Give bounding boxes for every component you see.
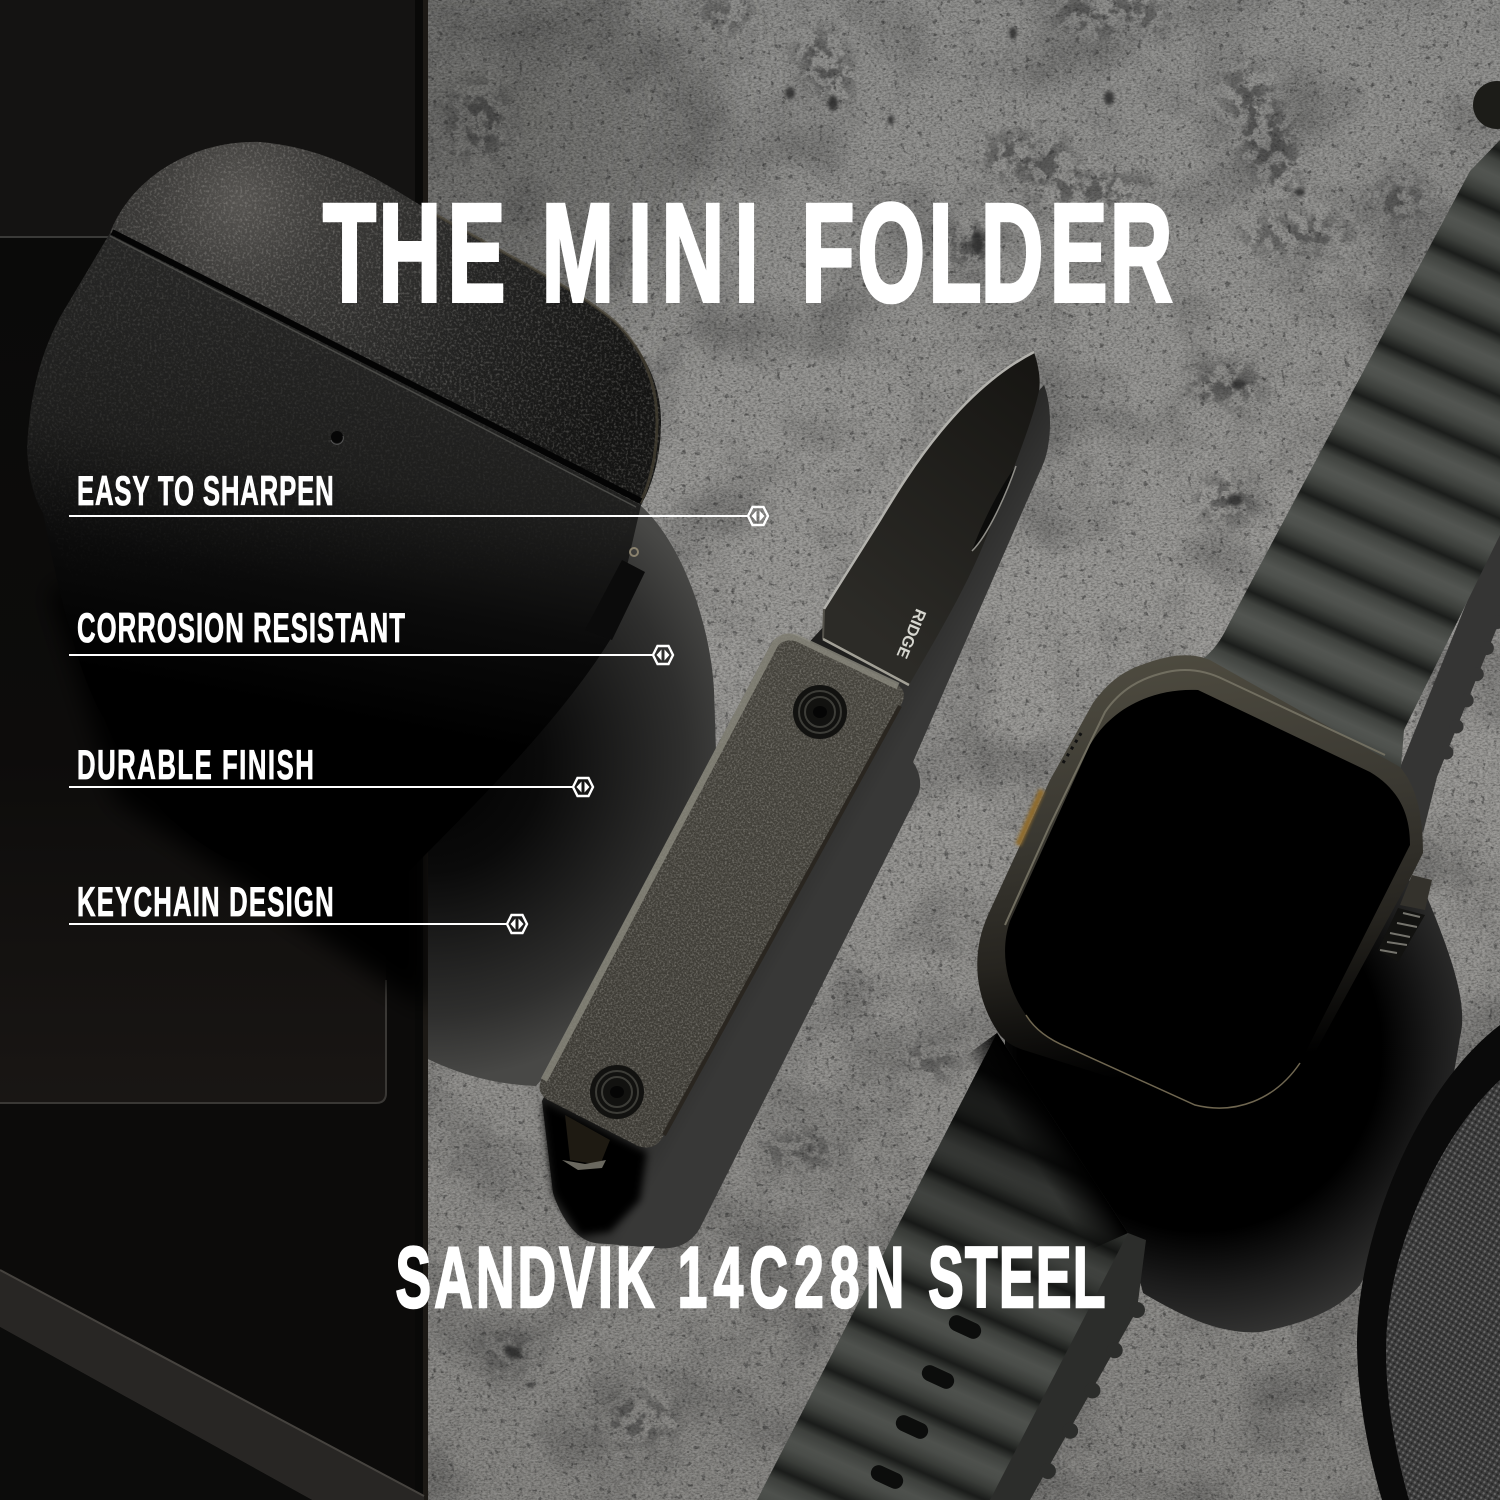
dark concrete spots [502, 27, 1305, 1387]
watch screen [1005, 690, 1410, 1108]
band end [1473, 81, 1500, 129]
subtitle: 14C28N [678, 1230, 910, 1326]
blade logo: RIDGE [893, 606, 929, 661]
icon: keyring loop of knife [542, 1101, 647, 1236]
device pad [0, 238, 386, 1103]
watch crown [1378, 908, 1425, 962]
cast shadow of the earbud case [428, 500, 716, 1086]
watch shadow [1005, 880, 1462, 1332]
band shadow side wall [1395, 520, 1500, 833]
microphone hole [331, 431, 343, 444]
seam [112, 232, 641, 501]
bevelled edge highlight [544, 637, 898, 1080]
panel: dark slate on the left [0, 0, 428, 1500]
callout: keychain design: KEYCHAIN DESIGN [77, 880, 334, 926]
callout: durable finish [69, 743, 593, 796]
callout: keychain design [69, 880, 527, 933]
knife shadow [542, 385, 1050, 1248]
title: THE MINI FOLDER [323, 175, 1172, 331]
lower diagonal bar [0, 1270, 424, 1500]
icon: lower watch band [757, 1033, 1146, 1500]
band ribs [757, 1033, 1128, 1500]
icon: hex marker [573, 778, 593, 796]
clasp [585, 560, 645, 640]
band side wall [960, 1233, 1146, 1500]
icon: upper watch band [1195, 81, 1500, 833]
icon: fabric speaker dome [1357, 1025, 1500, 1500]
case body [27, 233, 641, 880]
black shadow cast onto the pad [50, 500, 428, 1010]
rim highlights [1005, 670, 1385, 925]
watch side button tab [1400, 875, 1432, 910]
callout: corrosion resistant: CORROSION RESISTANT [77, 606, 405, 652]
icon: hex marker [653, 646, 673, 664]
callout: easy to sharpen: EASY TO SHARPEN [77, 469, 334, 515]
icon: leather earbud case [27, 142, 661, 880]
subtitle: SANDVIK [396, 1230, 658, 1326]
band ribs [1195, 140, 1500, 780]
icon: knife handle [540, 634, 904, 1148]
bottom screw [590, 1065, 644, 1119]
icon: watch body [977, 655, 1432, 1114]
band holes [868, 1313, 984, 1491]
callout: easy to sharpen [69, 469, 768, 525]
icon: hex marker [507, 915, 527, 933]
panel: concrete background [428, 0, 1500, 1500]
top screw [793, 685, 847, 739]
callout: corrosion resistant [69, 606, 673, 664]
icon: hex marker [748, 507, 768, 525]
callout: durable finish: DURABLE FINISH [77, 743, 314, 789]
icon: black knife blade [823, 352, 1040, 685]
subtitle: STEEL [928, 1230, 1107, 1326]
case lid [110, 142, 661, 505]
blade thumb slot [972, 466, 1016, 551]
